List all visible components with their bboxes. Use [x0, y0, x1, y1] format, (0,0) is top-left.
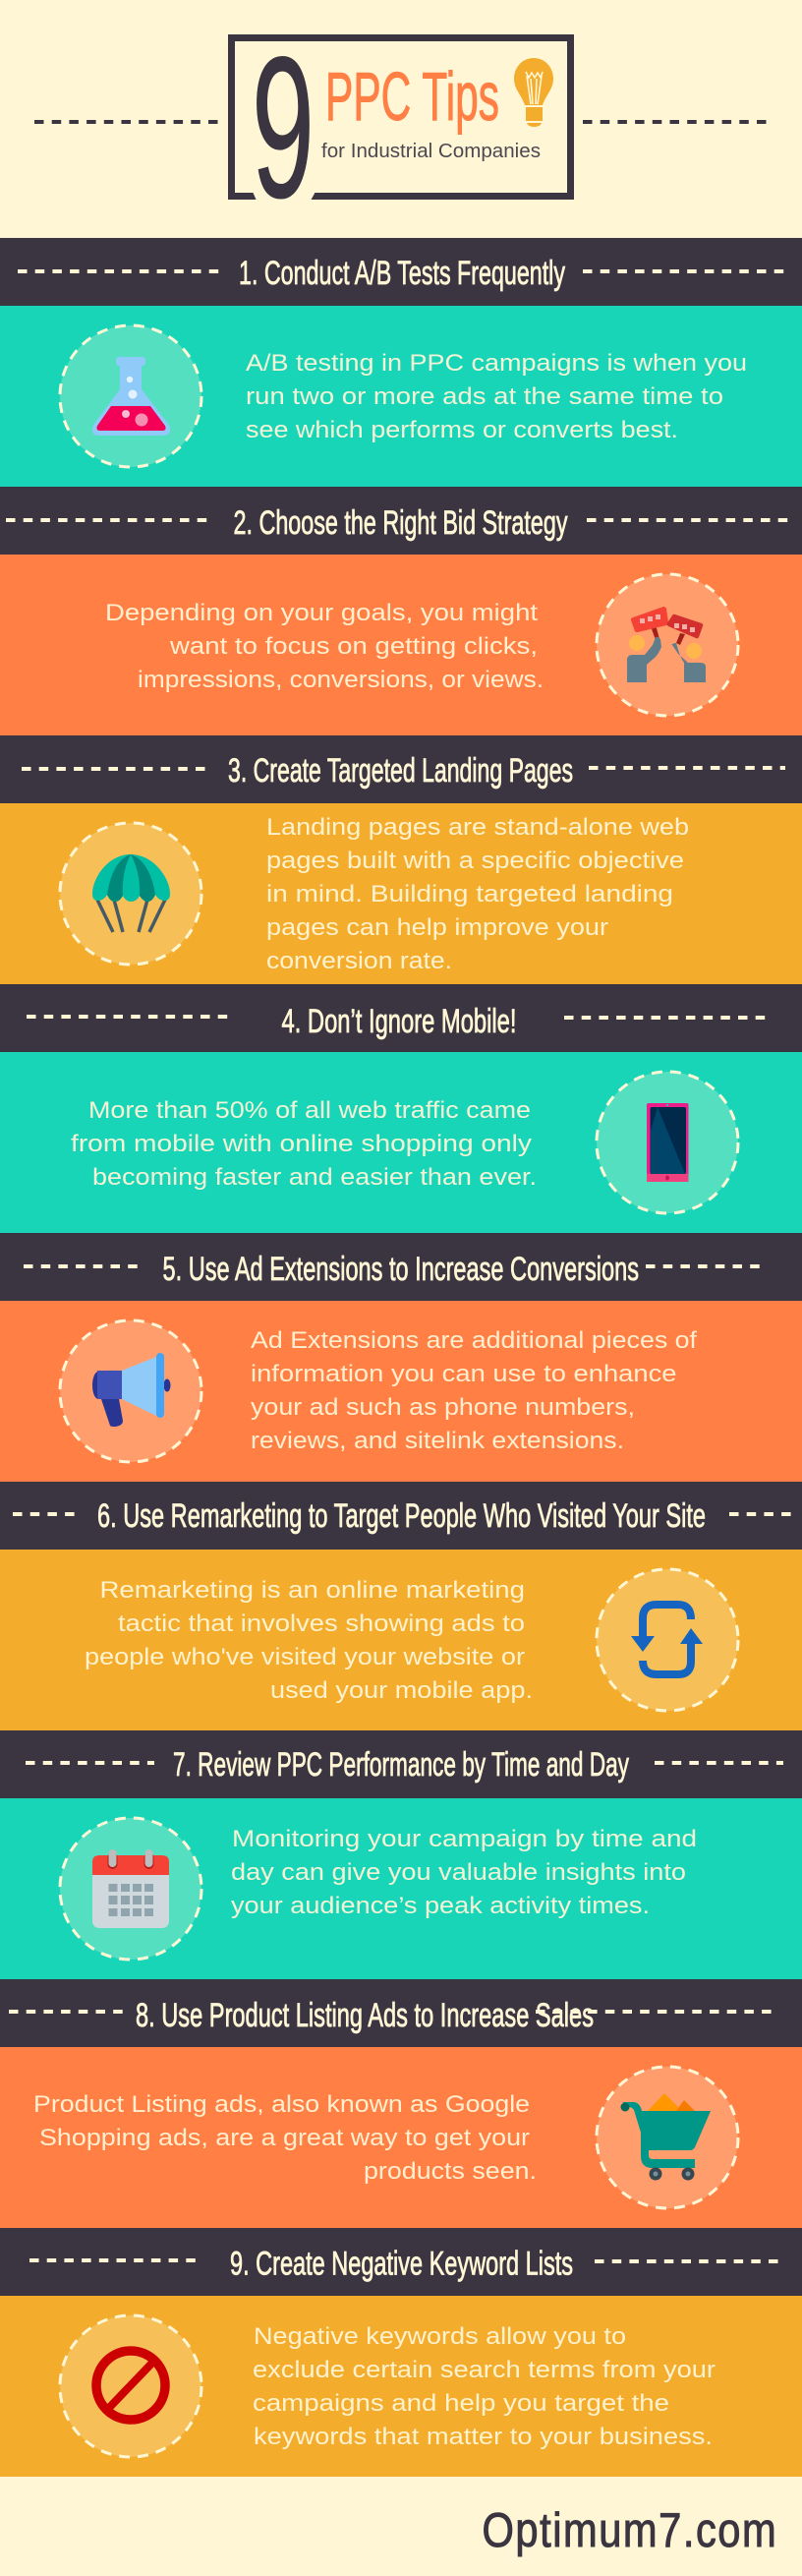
text: tip 5: your ad such as phone numbers,: [251, 1394, 635, 1421]
text: tip 3: [266, 814, 689, 974]
text: tip 2: impressions, conversions, or views.: [138, 667, 544, 693]
text: tip 7: Monitoring your campaign by time and: [232, 1826, 697, 1852]
text: tip 6: people who've visited your website or: [85, 1644, 525, 1670]
text: tip 1: see which performs or converts best.: [246, 417, 678, 443]
text: tip 8: Shopping ads, are a great way to get your: [39, 2125, 530, 2151]
text: tip 4: [71, 1097, 537, 1191]
text: tip 2: want to focus on getting clicks,: [169, 633, 538, 660]
icon: light bulb: [514, 58, 553, 127]
panel: tip 8 product listing ads: [0, 1979, 802, 2228]
text: tip 3: Landing pages are stand-alone web: [266, 814, 689, 841]
text: tip 8: products seen.: [364, 2158, 537, 2185]
panel: tip 5 ad extensions: [0, 1233, 802, 1482]
big number nine: 9: [252, 16, 315, 240]
icon: shopping cart: [597, 2067, 738, 2208]
text: tip 8: Product Listing ads, also known as Google: [33, 2091, 530, 2118]
heading: tip 3: 3. Create Targeted Landing Pages: [228, 752, 573, 790]
text: tip 6: [85, 1577, 533, 1704]
icon: parachute: [60, 823, 201, 965]
panel: tip 3 landing pages: [0, 735, 802, 984]
text: tip 9: campaigns and help you target the: [253, 2390, 669, 2417]
panel: tip 1 A/B tests: [0, 238, 802, 487]
heading: PPC Tips: PPC Tips: [325, 58, 499, 135]
text: tip 5: Ad Extensions are additional pieces of: [251, 1327, 697, 1354]
panel: tip 7 time and day: [0, 1730, 802, 1979]
icon: refresh arrows: [597, 1569, 738, 1711]
text: tip 5: [251, 1327, 697, 1454]
text: tip 1: A/B testing in PPC campaigns is when you: [246, 350, 747, 377]
subtitle: for Industrial Companies: [321, 141, 541, 162]
icon: calendar: [60, 1818, 201, 1960]
text: tip 1: [246, 350, 747, 443]
text: tip 3: pages can help improve your: [266, 914, 608, 941]
text: tip 7: day can give you valuable insights into: [231, 1859, 686, 1886]
panel: tip 6 remarketing: [0, 1482, 802, 1730]
text: tip 7: [231, 1826, 697, 1919]
heading: tip 4: 4. Don’t Ignore Mobile!: [281, 1003, 517, 1040]
panel: tip 4 mobile: [0, 984, 802, 1233]
text: tip 6: Remarketing is an online marketing: [100, 1577, 525, 1604]
icon: hands holding signs: [597, 574, 738, 716]
title block: [34, 16, 769, 240]
text: tip 3: pages built with a specific objective: [266, 848, 684, 874]
text: tip 2: Depending on your goals, you might: [105, 600, 538, 626]
text: tip 5: information you can use to enhance: [251, 1361, 676, 1387]
text: tip 5: reviews, and sitelink extensions.: [251, 1428, 624, 1454]
heading: tip 1: 1. Conduct A/B Tests Frequently: [239, 255, 565, 292]
heading: tip 9: 9. Create Negative Keyword Lists: [230, 2246, 573, 2283]
icon: megaphone: [60, 1320, 201, 1462]
text: tip 3: in mind. Building targeted landing: [266, 881, 673, 907]
panel: tip 2 bid strategy: [0, 487, 802, 735]
icon: prohibition sign: [60, 2315, 201, 2457]
text: tip 4: More than 50% of all web traffic came: [88, 1097, 531, 1124]
text: tip 7: your audience’s peak activity times.: [231, 1893, 650, 1919]
heading: tip 2: 2. Choose the Right Bid Strategy: [234, 504, 568, 542]
text: tip 6: used your mobile app.: [270, 1677, 533, 1704]
text: tip 3: conversion rate.: [266, 948, 452, 974]
text: tip 9: [253, 2323, 716, 2450]
heading: tip 8: 8. Use Product Listing Ads to Increase Sales: [136, 1997, 594, 2034]
text: tip 9: keywords that matter to your business.: [254, 2424, 713, 2450]
footer: Optimum7.com: Optimum7.com: [482, 2503, 776, 2557]
text: tip 8: [33, 2091, 537, 2185]
icon: flask: [60, 325, 201, 467]
text: tip 4: becoming faster and easier than ever.: [92, 1164, 537, 1191]
text: tip 9: Negative keywords allow you to: [254, 2323, 626, 2350]
text: tip 2: [105, 600, 544, 693]
icon: smartphone: [597, 1072, 738, 1213]
text: tip 6: tactic that involves showing ads to: [118, 1610, 525, 1637]
text: tip 4: from mobile with online shopping only: [71, 1131, 533, 1157]
text: tip 1: run two or more ads at the same time to: [246, 383, 723, 410]
text: tip 9: exclude certain search terms from your: [253, 2357, 716, 2383]
panel: tip 9 negative keywords: [0, 2228, 802, 2477]
